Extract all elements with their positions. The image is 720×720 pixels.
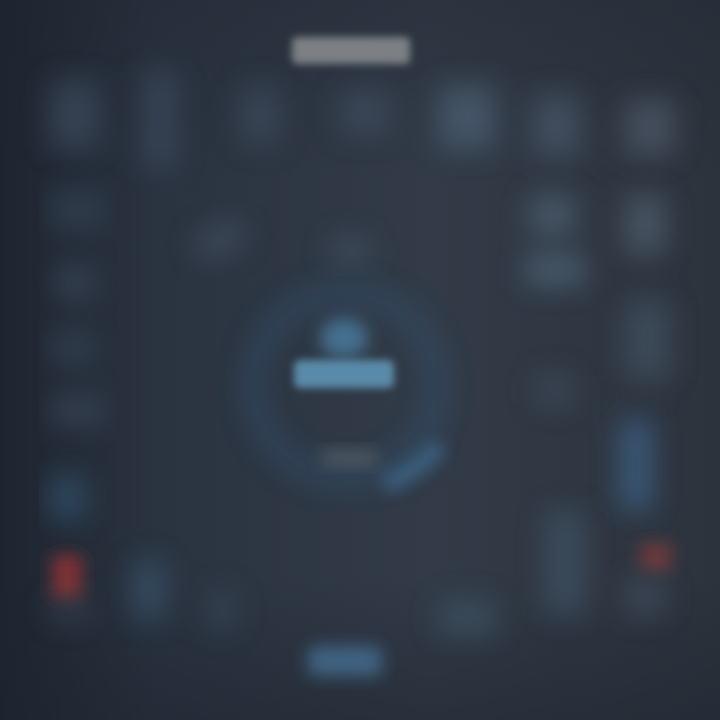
upper centre faint shapes [191,215,370,265]
right item 6 [620,420,652,510]
bottom pill [308,646,382,676]
title bar [292,37,410,64]
faint centre label [330,238,370,264]
left red marker [52,555,82,599]
bottom item 5 [625,580,665,615]
left item 5 [50,475,85,520]
right item 2 [625,195,665,255]
left column of blurred items [50,190,105,520]
central diagram [253,293,440,485]
icon head [320,318,368,358]
right red marker [640,543,672,571]
bottom item 2 [208,590,236,630]
bottom item 4 [545,510,585,615]
right item 4 [625,300,670,380]
top row of blurred cards [50,70,675,170]
bottom row of blurred items [50,510,665,635]
highlighted arc [385,445,440,485]
bottom item 3 [438,600,496,635]
card 6 [533,95,580,157]
bottom item 6 [50,600,90,620]
card 1 [50,80,100,150]
left item 4 [50,395,105,425]
left item 1 [50,190,105,230]
card 4 [340,90,390,135]
right item 5 [535,375,575,405]
ring [253,293,437,477]
central bright label [294,360,394,388]
left item 3 [50,330,95,365]
card 2 [143,70,177,170]
card 5 [438,85,496,150]
bottom item 1 [133,560,165,620]
lower label [322,450,377,466]
right column of blurred items [525,195,670,510]
right item 3 [525,255,585,285]
right item 1 [530,195,575,235]
red markers [52,543,672,599]
card 7 [625,100,675,155]
left item 2 [55,265,95,300]
faint diagonal shape [191,215,249,265]
card 3 [240,85,280,145]
